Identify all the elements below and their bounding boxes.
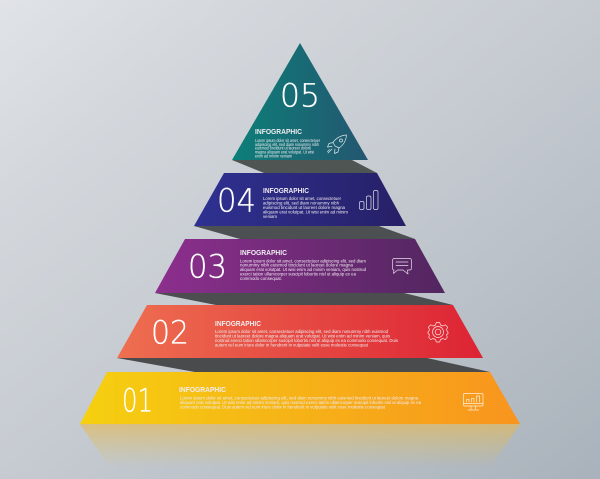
tier 02 body text: nostrud exerci tation ullamcorper suscipit lobortis nisl ut aliquip ex ea commodo consequat. Duis bbox=[215, 338, 399, 343]
panel: tier 05 bbox=[232, 43, 368, 160]
tier 02 body text bbox=[215, 329, 399, 348]
tier 03 number: 03 bbox=[188, 248, 227, 286]
tier 03 body text: commodo consequat. bbox=[240, 276, 282, 281]
tier 04 body text: adipiscing elit, sed diam nonummy nibh bbox=[263, 200, 339, 206]
tier 01 body text: aliquam erat volutpat. Ut wisi enim ad minim veniam, quis nostrud exerci tation ullamcorper suscipit lobortis nisl ut aliquip ex ea bbox=[180, 400, 421, 405]
icon: rocket bbox=[328, 135, 346, 154]
tier 05 number: 05 bbox=[280, 76, 320, 114]
tier 03 body text: aliquam erat volutpat. Ut wisi enim ad minim veniam, quis nostrud bbox=[240, 267, 366, 272]
tier 05 body text: enim ad minim veniam bbox=[255, 153, 292, 158]
tier 02 shape bbox=[117, 305, 483, 358]
tier 05 body text: adipiscing elit, sed diam nonummy nibh bbox=[255, 142, 320, 147]
tier 04 body text: veniam bbox=[263, 214, 277, 219]
shadow: between tiers 2 and 1 bbox=[117, 358, 490, 372]
shadow: between tiers 4 and 3 bbox=[194, 226, 415, 239]
floor reflection bbox=[80, 424, 520, 468]
shadow: between tiers 3 and 2 bbox=[155, 293, 453, 305]
tier 03 heading: INFOGRAPHIC bbox=[240, 248, 287, 257]
shadow: between tiers 5 and 4 bbox=[232, 160, 377, 173]
panel: tier 04 bbox=[194, 173, 406, 226]
tier 01 heading: INFOGRAPHIC bbox=[179, 385, 226, 394]
tier 03 body text: nonummy nibh euismod tincidunt ut laoreet dolore magna bbox=[240, 263, 353, 268]
icon: bar chart bbox=[360, 190, 378, 210]
tier 05 body text: Lorem ipsum dolor sit amet, consectetuer bbox=[255, 138, 321, 143]
panel: tier 03 bbox=[155, 239, 445, 293]
panel: tier 01 bbox=[80, 372, 520, 424]
tier 02 body text: Lorem ipsum dolor sit amet, consectetuer adipiscing elit, sed diam nonummy nibh euismod bbox=[215, 329, 388, 334]
panel: tier 02 bbox=[117, 305, 483, 358]
tier 03 body text bbox=[240, 258, 366, 281]
tier 01 body text: commodo consequat. Duis autem vel eum iriure dolor in hendrerit in vulputate velit esse molestie consequat bbox=[180, 405, 386, 410]
tier 03 shape bbox=[155, 239, 445, 293]
tier 05 body text: euismod tincidunt ut laoreet dolore bbox=[255, 146, 312, 151]
tier 04 body text: aliquam erat volutpat. Ut wisi enim ad minim bbox=[263, 210, 348, 214]
tier 03 body text: exerci tation ullamcorper suscipit lobortis nisl ut aliquip ex ea bbox=[240, 272, 356, 276]
tier 02 number: 02 bbox=[151, 314, 189, 352]
tier 02 body text: tincidunt ut laoreet dolore magna aliquam erat volutpat. Ut wisi enim ad minim veniam, quis bbox=[215, 334, 391, 338]
tier 05 shape bbox=[232, 43, 368, 160]
tier 02 heading: INFOGRAPHIC bbox=[215, 319, 261, 328]
tier 04 body text: Lorem ipsum dolor sit amet, consectetuer bbox=[263, 196, 341, 201]
icon: monitor bbox=[464, 394, 483, 410]
tier 04 shape bbox=[194, 173, 406, 226]
icon: gear bbox=[428, 322, 448, 342]
tier 02 body text: autem vel eum iriure dolor in hendrerit in vulputate velit esse molestie consequat bbox=[215, 343, 369, 348]
tier 01 body text: Lorem ipsum dolor sit amet, consectetuer adipiscing elit, sed diam nonummy nibh euismod tincidunt ut laoreet dolore magna bbox=[180, 396, 418, 400]
tier 03 body text: Lorem ipsum dolor sit amet, consectetuer adipiscing elit, sed diam bbox=[240, 258, 366, 263]
tier 04 number: 04 bbox=[217, 182, 256, 220]
tier 05 heading: INFOGRAPHIC bbox=[255, 127, 302, 136]
tier 05 body text: magna aliquam erat volutpat. Ut wisi bbox=[255, 150, 314, 154]
tier 01 body text bbox=[180, 396, 421, 410]
tier 04 heading: INFOGRAPHIC bbox=[263, 186, 309, 195]
tier 01 number: 01 bbox=[122, 382, 153, 420]
icon: chat bubble bbox=[392, 258, 412, 274]
tier 04 body text bbox=[263, 196, 348, 219]
tier 05 body text bbox=[255, 138, 321, 158]
tier 01 shape bbox=[80, 372, 520, 424]
tier 04 body text: euismod tincidunt ut laoreet dolore magna bbox=[263, 205, 345, 210]
